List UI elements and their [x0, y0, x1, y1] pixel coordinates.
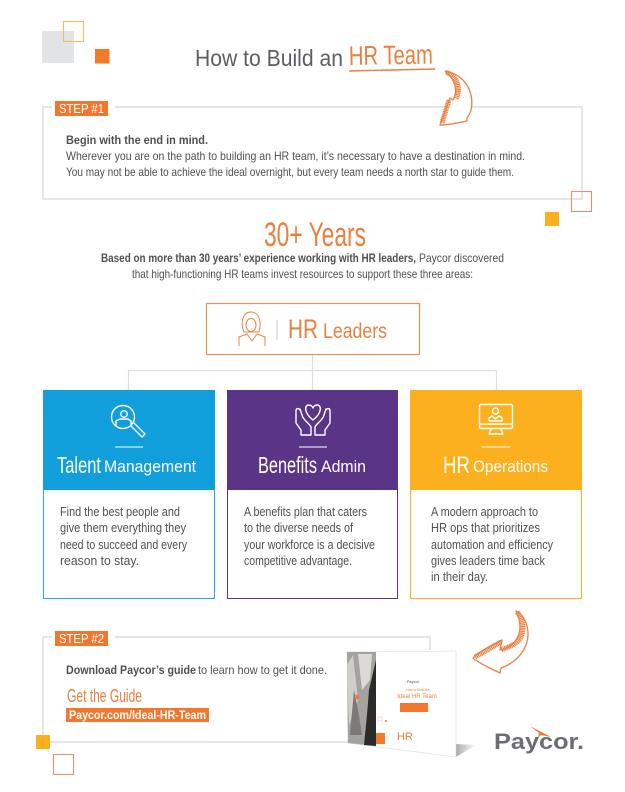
book text: Ideal HR Team	[397, 694, 437, 700]
card text: competitive advantage.	[244, 553, 352, 568]
card text	[431, 504, 554, 584]
card title: Operations	[473, 457, 548, 476]
intro text: that high-functioning HR teams invest resources to support these three areas:	[132, 267, 473, 281]
card text: gives leaders time back	[431, 553, 546, 568]
guide book	[347, 651, 476, 757]
icon: hands and heart	[296, 405, 330, 435]
arrow: to guide	[473, 611, 528, 673]
card title	[443, 452, 548, 479]
card text: your workforce is a decisive	[244, 537, 375, 552]
panel: step 1	[43, 101, 582, 199]
title: HR Team	[349, 40, 433, 71]
step 1 label: STEP #1	[59, 102, 104, 116]
card text: give them everything they	[60, 520, 187, 535]
step 2 label: STEP #2	[59, 632, 104, 646]
decorative squares: step 1 corner	[545, 192, 592, 226]
label	[288, 314, 387, 344]
link: Paycor.com/Ideal-HR-Team	[69, 710, 206, 722]
intro text	[101, 251, 504, 281]
book text: HR	[397, 731, 413, 743]
card text: to the diverse needs of	[244, 520, 353, 535]
card title: HR	[443, 452, 470, 479]
step 1 frame	[43, 107, 582, 199]
label: HR	[288, 314, 318, 344]
decorative squares: bottom left	[36, 735, 74, 774]
panel: Talent Management	[43, 390, 215, 598]
step 2 frame	[43, 637, 430, 742]
book text: Paycor	[407, 679, 420, 684]
get the guide: Get the Guide	[67, 686, 142, 706]
card title: Benefits	[258, 452, 317, 478]
card text: A modern approach to	[431, 504, 538, 519]
heading: 30+ Years: 30+ Years	[264, 216, 366, 254]
book photo	[347, 652, 376, 746]
step 1 text: You may not be able to achieve the ideal overnight, but every team needs a north star to guide them.	[66, 165, 514, 179]
icon: magnifier	[112, 406, 145, 437]
card title: Talent	[57, 452, 101, 478]
card text: in their day.	[431, 569, 488, 584]
step 2 text	[66, 663, 327, 677]
step 1 text	[66, 133, 525, 179]
intro text: Paycor discovered	[419, 251, 504, 265]
step 1 text: Begin with the end in mind.	[66, 133, 208, 147]
arrow: title to step 1	[440, 71, 472, 125]
card text: Find the best people and	[60, 504, 180, 519]
card text: reason to stay.	[60, 553, 139, 568]
card text	[60, 504, 187, 568]
card title: Admin	[321, 457, 366, 476]
step 2 text: Download Paycor’s guide	[66, 663, 196, 677]
logo: Paycor: Paycor.	[494, 729, 584, 754]
panel: step 2	[43, 631, 430, 742]
label: Leaders	[323, 320, 387, 343]
card text: automation and efficiency	[431, 537, 554, 552]
card title	[57, 452, 196, 478]
title	[195, 40, 435, 71]
book text: How to Build the	[406, 688, 430, 692]
icon: monitor	[480, 404, 512, 434]
title: How to Build an	[195, 45, 343, 71]
card text: A benefits plan that caters	[244, 504, 367, 519]
step 2 text: to learn how to get it done.	[198, 663, 327, 677]
card title: Management	[104, 457, 196, 476]
panel: HR Leaders	[206, 304, 420, 354]
card text: need to succeed and every	[60, 537, 187, 552]
decorative squares: top left	[42, 22, 110, 64]
book text	[397, 679, 437, 743]
icon: leader	[239, 312, 265, 346]
intro text: Based on more than 30 years’ experience working with HR leaders,	[101, 251, 416, 265]
panel: HR Operations	[410, 390, 582, 598]
step 1 text: Wherever you are on the path to building an HR team, it’s necessary to have a destination in mind.	[66, 149, 525, 163]
panel: Benefits Admin	[227, 390, 398, 598]
card text: HR ops that prioritizes	[431, 520, 540, 535]
card text	[244, 504, 375, 568]
